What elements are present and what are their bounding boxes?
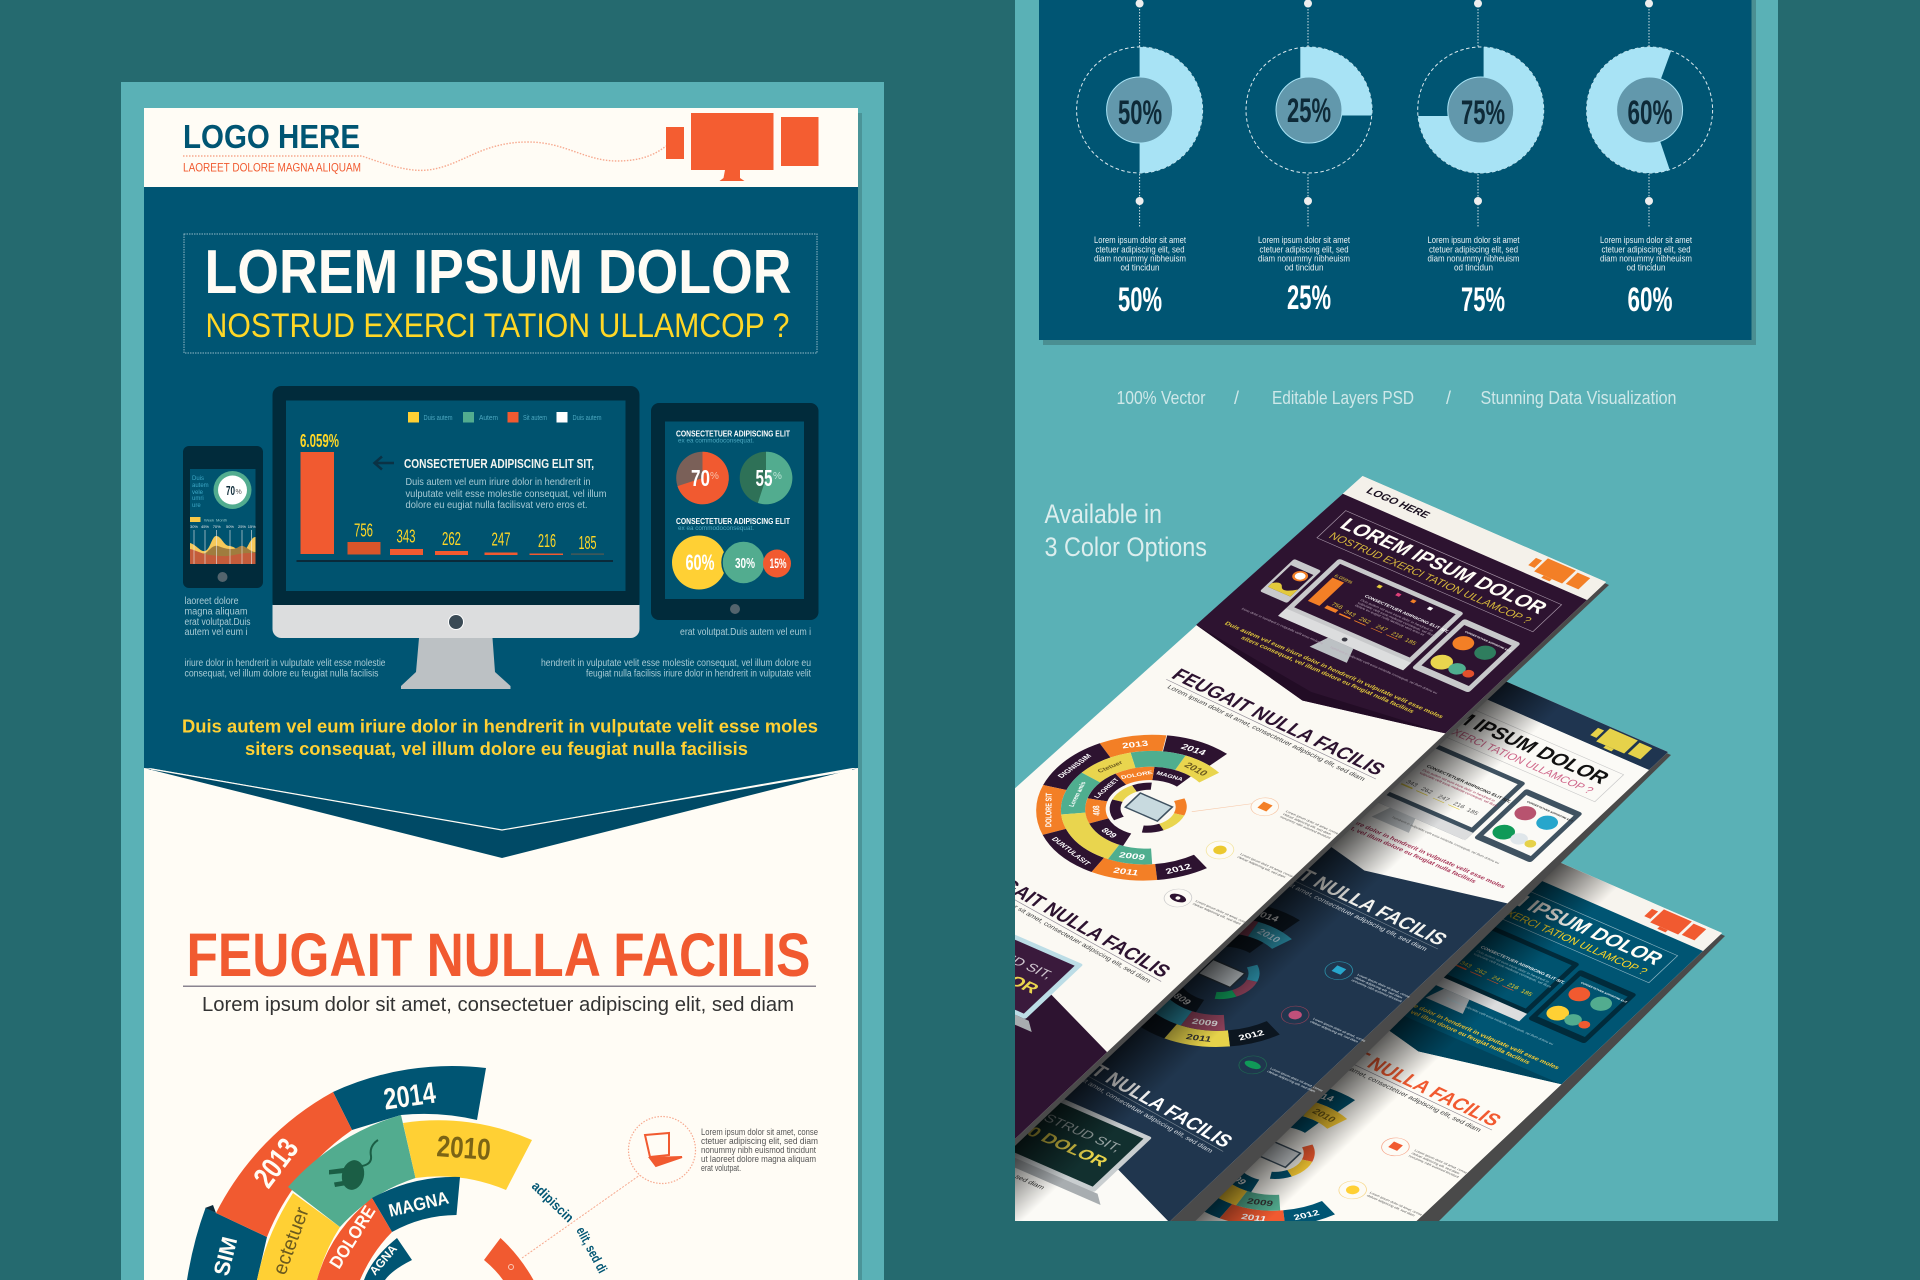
bar chart: 247 <box>492 530 510 550</box>
bubble chart <box>672 536 791 590</box>
mini wheel <box>1036 734 1227 881</box>
phone tabs: Month <box>216 518 227 522</box>
mini wheel: DOLORE SIT <box>1043 792 1054 827</box>
mockup: navy colour page: 2009 <box>1190 1017 1219 1029</box>
mockup: navy colour page: 262 <box>1419 786 1434 795</box>
mini wheel: 2009 <box>1118 851 1147 862</box>
caption: bottom right: hendrerit in vulputate velit esse molestie consequat, vel illum dolore eu <box>541 658 811 669</box>
segment: red inner <box>484 1238 534 1280</box>
mini title: LOREM IPSUM DOLOR <box>1335 514 1553 618</box>
chart legend: Autem <box>479 415 498 422</box>
donut: 50 percent: diam nonummy nibheuism <box>1094 252 1186 264</box>
mockup: navy colour page: CONSECTETUER ADIPISCING ELIT <box>1526 800 1575 823</box>
segment: magna: MAGNA <box>387 1188 451 1221</box>
mockup: purple colour page: iriure dolor in hendrerit in vulputate velit esse molestie <box>1241 607 1324 645</box>
mockup: blue colour page: 756 <box>1445 953 1461 962</box>
feature tagline: Stunning Data Visualization <box>1480 388 1676 408</box>
icon: laptop <box>645 1133 682 1166</box>
monitor stand <box>401 638 510 689</box>
phone text: Duis <box>192 476 204 482</box>
mini callouts: ctetuer adipiscing elit, sed diam <box>1192 902 1242 926</box>
donut: 60 percent: od tincidun <box>1626 262 1666 272</box>
mockup: blue colour page: siters consequat, vel illum dolore eu feugiat nulla facilisis <box>1355 986 1532 1066</box>
caption: bottom right <box>541 658 811 680</box>
phone donut: 70 <box>226 483 235 498</box>
mockup: purple colour page: hendrerit in vulputate velit esse molestie consequat, vel illum dolore eu <box>1329 646 1438 695</box>
phone area chart <box>190 524 256 564</box>
mini wheel: DIGNISSIM <box>1055 752 1094 779</box>
mini second heading: Lorem ipsum dolor sit amet, consectetuer adipiscing elit, sed diam <box>962 876 1152 985</box>
donut: 25 percent: Lorem ipsum dolor sit amet <box>1258 234 1350 245</box>
caption: bottom right: feugiat nulla facilisis iriure dolor in hendrerit in vulputate velit <box>586 668 811 680</box>
mini wheel: LAOREET <box>1093 777 1121 799</box>
bubble chart: 30% <box>735 555 755 572</box>
icon: plug <box>329 1140 378 1192</box>
mockup: navy colour page: Lorem ipsum dolor sit amet, conse <box>1312 1017 1367 1043</box>
mockup: blue colour page: LOREM IPSUM DOLOR <box>1451 865 1669 969</box>
donut: 25 percent: 25% <box>1287 279 1331 317</box>
phone caption: magna aliquam <box>184 606 248 618</box>
mockup: blue colour page: Lorem ipsum dolor sit amet, consectetuer adipiscing elit, sed diam <box>1281 1036 1483 1133</box>
mini phone <box>1260 559 1321 603</box>
callout text <box>701 1127 818 1173</box>
phone caption <box>184 596 250 638</box>
phone donut <box>214 471 252 509</box>
mockup: navy colour page: 2014 <box>1251 909 1281 924</box>
monitor paragraph: Duis autem vel eum iriure dolor in hendrerit in <box>406 476 591 488</box>
phone area chart: 50% <box>226 524 234 529</box>
mockup: navy colour page: hendrerit in vulputate velit esse molestie consequat, vel illum dolore eu <box>1391 816 1500 865</box>
mockup: blue colour page: 2012 <box>1292 1209 1322 1222</box>
donut: 75 percent: 75% <box>1461 94 1505 132</box>
segment: 2014: 2014 <box>382 1077 438 1117</box>
donut: 60 percent: diam nonummy nibheuism <box>1600 252 1692 264</box>
donut: 75 percent: Lorem ipsum dolor sit amet <box>1428 234 1520 245</box>
donut: 75 percent: od tincidun <box>1454 262 1493 272</box>
segment: dolore: DOLORE <box>325 1202 379 1272</box>
phone caption: erat volutpat.Duis <box>184 617 250 628</box>
segment: yellow consectetuer <box>257 1193 340 1280</box>
mini wheel: 2012 <box>1164 862 1194 876</box>
bar chart <box>296 431 613 562</box>
mini second heading: FEUGAIT NULLA FACILIS <box>963 857 1175 981</box>
mini monitor: CONSECTETUER ADIPISCING ELIT SIT, <box>1363 594 1450 634</box>
donut: 75 percent: ctetuer adipiscing elit, sed <box>1429 244 1518 254</box>
section heading <box>183 921 816 1016</box>
chart legend: Sit autem <box>523 415 547 422</box>
mini second heading <box>1015 880 1170 983</box>
callout text: nonummy nibh euismod tincidunt <box>701 1145 816 1155</box>
mockup: navy colour page: Lorem ipsum dolor sit amet, consectetuer adipiscing elit, sed diam <box>1024 1046 1214 1155</box>
caption: bottom left: consequat, vel illum dolore eu feugiat nulla facilisis <box>184 668 378 680</box>
mockup: blue colour page: nonummy nibh euismod tincidunt <box>1408 1154 1460 1179</box>
tablet device: ex ea commodoconsequat. <box>678 525 754 532</box>
donut: 75 percent: 75% <box>1461 281 1505 319</box>
mockup: navy colour page: ctetuer adipiscing elit, sed diam <box>1266 1070 1316 1093</box>
monitor paragraph <box>406 476 607 511</box>
phone text: umri <box>192 496 204 502</box>
subtitle: NOSTRUD EXERCI TATION ULLAMCOP ? <box>206 307 790 345</box>
mockup: navy colour page: 000,000 DOLOR <box>971 1101 1112 1170</box>
dotted connector <box>183 142 666 170</box>
phone text <box>192 476 209 509</box>
donut: 60 percent: 60% <box>1628 281 1672 319</box>
mockup: navy colour page: vulputate velit esse molestie consequat, vel illum <box>1418 771 1498 807</box>
pie chart 70 percent: % <box>710 471 719 482</box>
desktop monitor <box>272 386 640 689</box>
bubble chart: 15% <box>770 555 787 571</box>
segment: inner magna: AGNA <box>367 1242 400 1278</box>
pie chart 70 percent <box>676 452 729 504</box>
mini monitor: 343 <box>1342 609 1358 618</box>
callout: laptop <box>522 1116 818 1258</box>
curved label: adipiscin: adipiscin <box>529 1178 577 1225</box>
segment: 2010 <box>403 1120 532 1190</box>
tablet heading one: CONSECTETUER ADIPISCING ELIT <box>676 430 790 438</box>
title box <box>184 234 817 353</box>
icon: devices <box>666 113 818 181</box>
mockup: blue colour page: 247 <box>1490 975 1505 984</box>
mini monitor: Duis autem vel eum iriure dolor in hendrerit in <box>1359 599 1434 633</box>
mockup: navy colour page: 185 <box>1465 808 1480 817</box>
segment: 2014 <box>333 1066 486 1130</box>
phone text: vele <box>192 490 204 496</box>
mockup: blue colour page: NOSTRUD EXERCI TATION ULLAMCOP ? <box>1442 881 1651 977</box>
mockup: blue colour page: CONSECTETUER ADIPISCING ELIT <box>1580 981 1629 1004</box>
feature tagline: / <box>1446 388 1451 408</box>
mini monitor: 247 <box>1374 624 1389 633</box>
donut: 25 percent: od tincidun <box>1284 262 1324 272</box>
mockup: navy colour page: Lorem ipsum dolor sit amet, consectetuer adipiscing elit, sed diam <box>1227 855 1429 952</box>
mockup: blue colour page <box>1196 862 1725 1221</box>
mini wheel: Lorem amis <box>1069 781 1088 807</box>
segment: 2013: 2013 <box>248 1133 305 1194</box>
donut: 50 percent: od tincidun <box>1120 262 1160 272</box>
mockup: navy colour page: Lorem ipsum dolor sit amet, conse <box>1356 973 1411 999</box>
mini callouts: Lorem ipsum dolor sit amet, conse <box>1239 853 1294 878</box>
phone caption: laoreet dolore <box>184 596 239 607</box>
donut: 50 percent: 50% <box>1118 94 1162 132</box>
mini wheel: 809 <box>1099 826 1120 840</box>
mockup: navy colour page: consectetuer adipiscing elit, sed diam <box>928 1137 1046 1191</box>
mockup: blue colour page: 343 <box>1458 960 1474 969</box>
mockup: navy colour page: Duis autem vel eum iriure dolor in hendrerit in <box>1421 769 1496 803</box>
mini wheel: 2010 <box>1181 761 1210 778</box>
mini laptop <box>1015 934 1082 1032</box>
donut: 50 percent: ctetuer adipiscing elit, sed <box>1096 244 1184 254</box>
feature tagline: Editable Layers PSD <box>1272 388 1414 408</box>
panel: left infographic sheet <box>121 82 884 1280</box>
colour options note <box>1044 499 1207 562</box>
main title: LOREM IPSUM DOLOR <box>204 238 792 307</box>
phone area chart: 70% <box>213 524 221 529</box>
pie chart 70 percent: 70 <box>691 465 710 491</box>
bar chart: 216 <box>538 531 556 551</box>
segment: dolore <box>317 1198 392 1280</box>
segment: magna <box>372 1177 460 1232</box>
mini wheel: MAGNA <box>1155 771 1185 783</box>
mockup: navy colour page: 2011 <box>1185 1033 1213 1044</box>
mockup: navy colour page: 2012 <box>1237 1029 1267 1043</box>
donut: 25 percent: ctetuer adipiscing elit, sed <box>1260 244 1348 254</box>
feature tagline: 100% Vector <box>1116 388 1206 408</box>
mini monitor: 262 <box>1357 616 1372 625</box>
phone text: ure <box>192 503 201 509</box>
callout text: ctetuer adipiscing elit, sed diam <box>701 1136 818 1146</box>
mini monitor <box>1278 559 1463 670</box>
mockup: blue colour page: 185 <box>1519 989 1534 998</box>
yellow statement: siters consequat, vel illum dolore eu feugiat nulla facilisis <box>245 738 748 759</box>
mini wheel: DOLORE <box>1120 770 1153 780</box>
segment: inner magna <box>364 1238 412 1280</box>
colour options note: 3 Color Options <box>1044 532 1207 562</box>
logo tagline: LAOREET DOLORE MAGNA ALIQUAM <box>183 160 361 174</box>
mockup: purple colour page: siters consequat, vel illum dolore eu feugiat nulla facilisis <box>1239 635 1416 715</box>
mockup: blue colour page: 262 <box>1473 967 1488 976</box>
mini wheel: 2014 <box>1178 743 1208 758</box>
section subheading: Lorem ipsum dolor sit amet, consectetuer adipiscing elit, sed diam <box>202 994 794 1016</box>
mockup: blue colour page: 2014 <box>1306 1089 1336 1104</box>
mini heading: FEUGAIT NULLA FACILIS <box>1167 665 1390 779</box>
donut: 25 percent: 25% <box>1287 92 1331 130</box>
mockup: navy colour page: NOSTRUD EXERCI TATION ULLAMCOP ? <box>1388 700 1597 796</box>
mini monitor: 756 <box>1329 602 1345 611</box>
feature tagline: / <box>1234 388 1239 408</box>
mockup: navy colour page: 2010 <box>1254 927 1283 945</box>
mini laptop: NOSTRUD SIT, <box>951 929 1057 981</box>
phone tabs <box>190 517 227 522</box>
mini monitor: vulputate velit esse molestie consequat, vel illum <box>1356 601 1436 637</box>
donut: 50 percent <box>1077 0 1203 319</box>
donut: 60 percent: ctetuer adipiscing elit, sed <box>1602 244 1690 254</box>
mini wheel: 2013 <box>1121 739 1150 751</box>
phone caption: autem vel eum i <box>184 627 248 638</box>
phone device <box>183 446 263 588</box>
mockup: navy colour page: 216 <box>1451 801 1467 810</box>
bar chart: 262 <box>442 529 461 549</box>
mockup: blue colour page: vulputate velit esse molestie consequat, vel illum <box>1472 952 1552 988</box>
segment: dignissim: SIM <box>209 1234 242 1278</box>
tablet heading two: CONSECTETUER ADIPISCING ELIT <box>676 517 790 526</box>
mockup: navy colour page: ctetuer adipiscing elit, sed diam <box>1353 976 1404 999</box>
mockup: blue colour page: Duis autem vel eum iriure dolor in hendrerit in <box>1475 950 1550 984</box>
mini callouts <box>1164 798 1338 925</box>
mockup: navy colour page: NOSTRUD SIT, <box>1020 1102 1126 1154</box>
mini callouts: ctetuer adipiscing elit, sed diam <box>1282 813 1332 836</box>
mockup: navy colour page: FEUGAIT NULLA FACILIS <box>1025 1027 1237 1151</box>
mini callouts: ctetuer adipiscing elit, sed diam <box>1236 855 1287 879</box>
tablet caption: erat volutpat.Duis autem vel eum i <box>680 627 811 638</box>
yellow statement <box>182 716 818 759</box>
monitor paragraph: vulputate velit esse molestie consequat, vel illum <box>406 488 607 500</box>
segment: 2013 <box>216 1092 352 1237</box>
mockup: navy colour page: CONSECTETUER ADIPISCING ELIT SIT, <box>1425 764 1512 804</box>
mockup: blue colour page: 216 <box>1505 982 1521 991</box>
mini wheel: 408 <box>1091 805 1102 816</box>
panel: right preview sheet <box>1015 0 1778 1221</box>
mockup: blue colour page: CONSECTETUER ADIPISCING ELIT SIT, <box>1479 945 1566 985</box>
bar chart: 185 <box>578 533 596 553</box>
mockup: blue colour page: 2010 <box>1309 1107 1338 1125</box>
radial wheel chart <box>187 1066 610 1280</box>
phone area chart: 45% <box>201 524 209 529</box>
tablet device: ex ea commodoconsequat. <box>678 438 754 444</box>
mini monitor: 185 <box>1403 638 1418 647</box>
mockup: navy colour page: FEUGAIT NULLA FACILIS <box>1229 835 1452 949</box>
mini tablet: CONSECTETUER ADIPISCING ELIT <box>1464 630 1513 653</box>
mockup: navy colour page: Lorem ipsum dolor sit amet, conse <box>1269 1067 1324 1092</box>
feature tagline <box>1118 390 1676 408</box>
mockup: blue colour page: FEUGAIT NULLA FACILIS <box>1283 1016 1506 1130</box>
mini statement: Duis autem vel eum iriure dolor in hendrerit in vulputate velit esse moles <box>1223 621 1445 720</box>
arrow <box>374 456 394 470</box>
section heading: FEUGAIT NULLA FACILIS <box>186 921 810 989</box>
phone area chart: 25% <box>238 524 246 529</box>
mini wheel: 2011 <box>1112 866 1140 878</box>
phone donut: % <box>236 489 242 496</box>
callout text: ut laoreet dolore magna aliquam <box>701 1154 816 1164</box>
donut: 50 percent: 50% <box>1118 281 1162 319</box>
monitor paragraph: dolore eu eugiat nulla facilisvat vero eros et. <box>406 499 588 511</box>
mockup: blue colour page: 2009 <box>1246 1197 1275 1209</box>
monitor heading: CONSECTETUER ADIPISCING ELIT SIT, <box>404 456 594 471</box>
chart legend <box>408 412 602 422</box>
donut: 60 percent <box>1587 0 1713 319</box>
bar chart: 343 <box>396 526 416 546</box>
colour options note: Available in <box>1044 499 1162 529</box>
hero section background with chevron <box>144 187 858 858</box>
pie chart 55 percent: 55 <box>756 465 773 491</box>
donut: 50 percent: Lorem ipsum dolor sit amet <box>1094 234 1186 245</box>
mockup: blue colour page: 2011 <box>1240 1213 1268 1224</box>
mockup: blue colour page: ctetuer adipiscing elit, sed diam <box>1410 1152 1461 1175</box>
header: logo and device icons <box>183 113 818 181</box>
mini callouts: nonummy nibh euismod tincidunt <box>1279 815 1331 840</box>
mockup: blue colour page: Lorem ipsum dolor sit amet, conse <box>1369 1191 1423 1216</box>
mockup: navy colour page: 247 <box>1436 794 1451 803</box>
bar chart: 6.059% <box>300 431 339 451</box>
caption: bottom left <box>184 658 386 680</box>
mini monitor: 216 <box>1389 631 1405 640</box>
phone tabs: Week <box>204 518 214 522</box>
pie chart 55 percent: % <box>773 471 782 482</box>
mockup: navy colour page: ctetuer adipiscing elit, sed diam <box>1309 1020 1359 1043</box>
mini heading: Lorem ipsum dolor sit amet, consectetuer adipiscing elit, sed diam <box>1165 685 1367 782</box>
mockup: navy colour page: 809 <box>1170 992 1193 1007</box>
donut: 60 percent: Lorem ipsum dolor sit amet <box>1600 234 1692 245</box>
mockup: blue colour page: ctetuer adipiscing elit, sed diam <box>1366 1194 1416 1217</box>
mini logo: LOGO HERE <box>1363 486 1433 521</box>
mockup: blue colour page: Lorem ipsum dolor sit amet, conse <box>1413 1149 1468 1174</box>
tablet device <box>651 403 818 620</box>
logo: LOGO HERE <box>183 118 360 155</box>
mockup: navy colour page: Duis autem vel eum iriure dolor in hendrerit in vulputate velit esse moles <box>1285 791 1507 890</box>
donut: 25 percent: diam nonummy nibheuism <box>1258 252 1350 264</box>
chart legend: Duis autem <box>424 415 453 422</box>
mockup: navy colour page: siters consequat, vel illum dolore eu feugiat nulla facilisis <box>1301 805 1478 885</box>
phone area chart: 15% <box>248 524 256 529</box>
callout text: Lorem ipsum dolor sit amet, conse <box>701 1127 818 1137</box>
mini laptop: 000,000 DOLOR <box>902 928 1044 997</box>
panel: donut charts <box>1039 0 1756 345</box>
callout text: erat volutpat. <box>701 1163 741 1173</box>
mockup: purple colour page <box>1015 476 1609 1146</box>
mini wheel: Ctetuer <box>1096 760 1125 774</box>
mockup: blue colour page: Duis autem vel eum iriure dolor in hendrerit in vulputate velit esse moles <box>1339 972 1561 1071</box>
segment: dignissim <box>187 1205 267 1280</box>
mini lower section <box>1015 994 1107 1139</box>
mini callouts: Lorem ipsum dolor sit amet, conse <box>1194 900 1249 925</box>
pie chart 55 percent <box>740 452 792 504</box>
phone text: autem <box>192 483 209 489</box>
mini callouts: Lorem ipsum dolor sit amet, conse <box>1285 810 1339 835</box>
phone area chart: 30% <box>190 524 198 529</box>
mini tablet <box>1412 619 1521 693</box>
donut: 75 percent: diam nonummy nibheuism <box>1428 252 1520 264</box>
yellow statement: Duis autem vel eum iriure dolor in hendrerit in vulputate velit esse moles <box>182 716 818 736</box>
segment: yellow consectetuer: ectetuer <box>269 1204 314 1278</box>
mockup: navy colour page: 343 <box>1404 779 1420 788</box>
mockup: purple colour page: NOSTRUD EXERCI TATION ULLAMCOP ? <box>1326 530 1535 626</box>
mockup: navy colour page <box>1015 682 1671 1221</box>
donut: 60 percent: 60% <box>1628 94 1672 132</box>
mini monitor: 6.059% <box>1332 574 1354 585</box>
mockup: blue colour page: 809 <box>1225 1172 1249 1187</box>
caption: bottom left: iriure dolor in hendrerit in vulputate velit esse molestie <box>184 658 386 669</box>
bubble chart: 60% <box>686 550 714 575</box>
donut: 25 percent <box>1246 0 1372 317</box>
chart legend: Duis autem <box>572 415 602 422</box>
mockup: navy colour page: nonummy nibh euismod tincidunt <box>1350 979 1403 1003</box>
mini monitor: dolore eu eugiat nulla facilisvat vero eros et. <box>1354 604 1426 637</box>
mockup: navy colour page: LOREM IPSUM DOLOR <box>1397 684 1615 788</box>
segment: 2010: 2010 <box>436 1130 492 1167</box>
segment: plug <box>288 1115 416 1227</box>
donut: 75 percent <box>1418 0 1544 319</box>
mockup: blue colour page: hendrerit in vulputate velit esse molestie consequat, vel illum dolore eu <box>1445 997 1554 1046</box>
bar chart: 756 <box>354 520 373 540</box>
mini wheel: DUNTULASIT <box>1049 836 1093 867</box>
